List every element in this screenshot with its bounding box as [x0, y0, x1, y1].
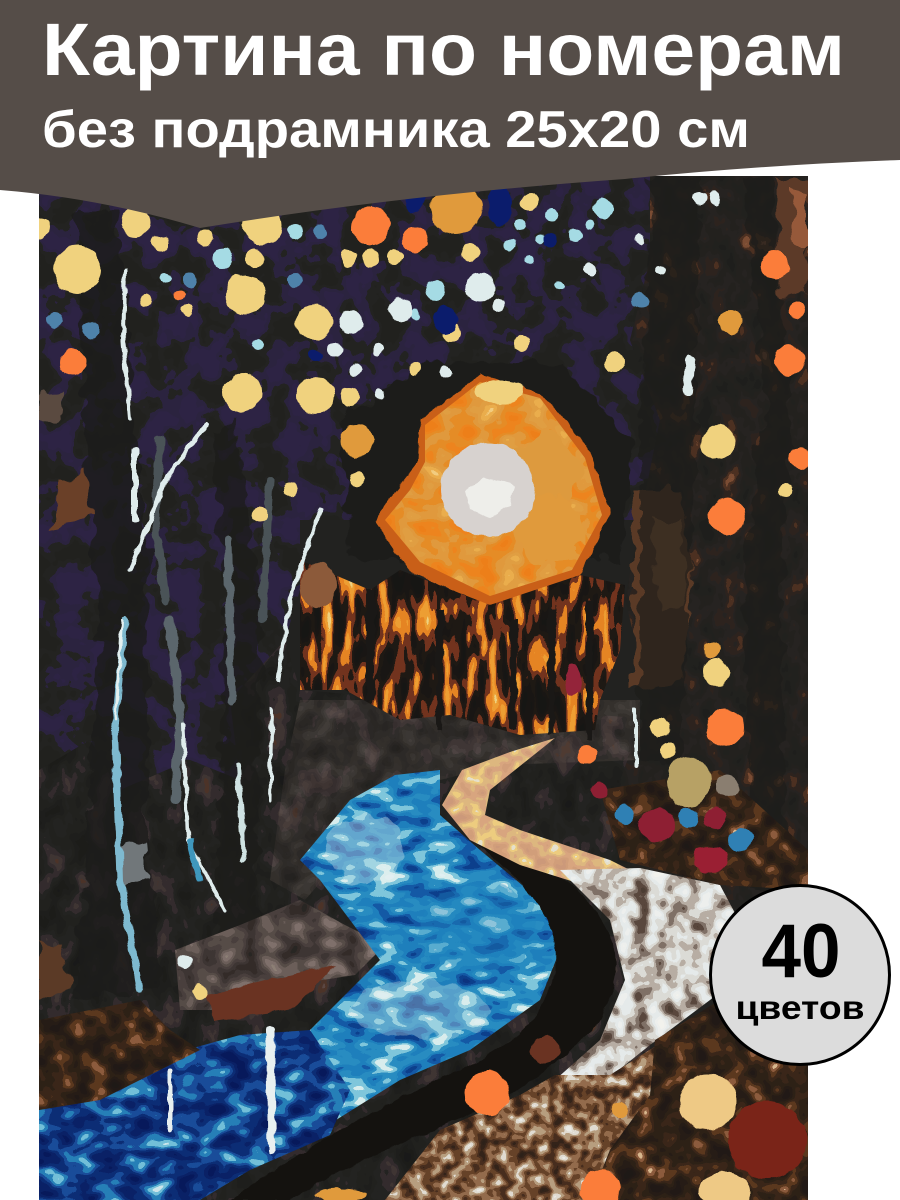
- badge number: 40: [762, 909, 840, 994]
- night sky background: [39, 176, 748, 1036]
- subtitle: без подрамника 25х20 см: [42, 101, 750, 159]
- white dots: [178, 192, 721, 969]
- autumn leaves cluster at lower right: [314, 757, 806, 1200]
- winding path: peach section: [442, 738, 627, 882]
- badge circle: [710, 886, 890, 1064]
- moon: [441, 443, 535, 537]
- painting: night forest with moon and river: [39, 176, 808, 1200]
- black river bank: [230, 815, 616, 1200]
- right bark and foliage: [620, 176, 808, 900]
- badge label: цветов: [736, 989, 864, 1026]
- upper river: [300, 770, 556, 1120]
- header banner: [0, 0, 900, 228]
- moon halo: [374, 375, 610, 606]
- pale highlights on tree trunks: [115, 270, 690, 1150]
- lower river: [39, 1030, 350, 1200]
- amber blobs: [340, 182, 742, 1118]
- light blue dots: [160, 198, 613, 350]
- orange light blobs: [60, 206, 811, 1200]
- forest ground behind the river: [175, 700, 640, 1022]
- title: Картина по номерам: [42, 8, 845, 91]
- dark tree trunks: [75, 176, 790, 1000]
- lower forest floor mottling: [39, 640, 660, 1200]
- badge: 40 colours: [709, 884, 891, 1066]
- river colour accents: [327, 815, 540, 1038]
- navy dots: [309, 177, 557, 361]
- autumn leaf ground: [39, 770, 808, 1200]
- winding path: snowy section: [560, 868, 734, 1075]
- small bark patches on the left: [39, 390, 150, 1000]
- glowing forest strips under the moon: [300, 560, 625, 740]
- winding path: mixed leaf section: [385, 1040, 665, 1200]
- banner shape: [0, 0, 900, 228]
- yellow light blobs: [30, 193, 792, 1000]
- blue dots: [47, 225, 648, 339]
